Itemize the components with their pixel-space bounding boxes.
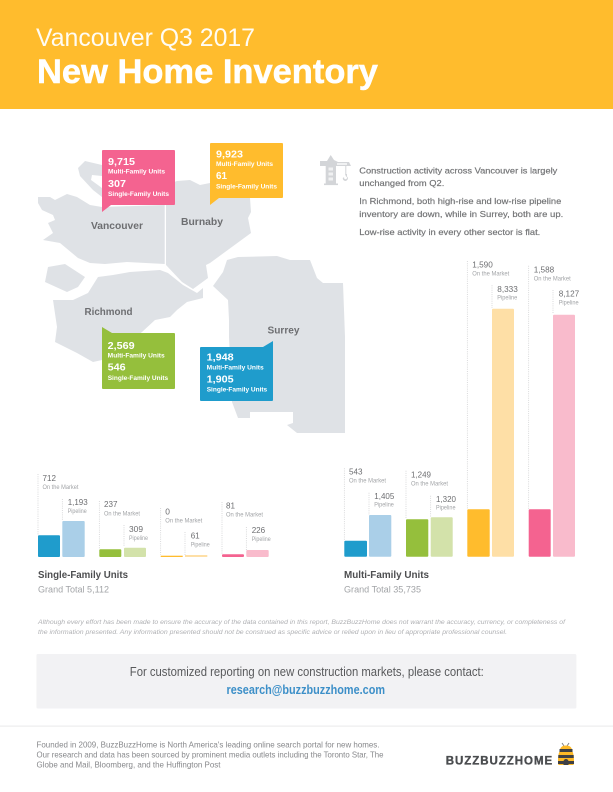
callout: Burnaby: 61: [216, 170, 227, 182]
bars: Surrey multi-family: 543: [349, 467, 363, 477]
bars: Burnaby multi-family: Pipeline: [497, 296, 518, 302]
bar chart: multi-family units: [344, 260, 580, 595]
callout: Vancouver: Single-Family Units: [108, 191, 169, 198]
bars: Surrey multi-family: [344, 467, 395, 557]
map label: Richmond: Richmond: [84, 306, 132, 318]
map region: island: [45, 264, 85, 292]
callout: Burnaby: Multi-Family Units: [216, 161, 273, 168]
bars: Surrey single-family: 1,193: [68, 497, 88, 507]
chart subtitle: single-family total: Grand Total 5,112: [38, 585, 109, 595]
intro text block: In Richmond, both high-rise and low-rise pipeline: [359, 196, 562, 206]
intro text block: Construction activity across Vancouver is largely: [359, 165, 558, 175]
about text: [36, 740, 384, 770]
map region: Vancouver: [38, 194, 165, 264]
map label: Vancouver: Vancouver: [91, 220, 143, 232]
bars: Richmond single-family: Pipeline: [129, 536, 149, 542]
callout: Surrey: Multi-Family Units: [207, 365, 264, 372]
icon: beehive: [558, 743, 574, 765]
contact email: research@buzzbuzzhome.com: [226, 683, 385, 697]
bars: Vancouver multi-family: [529, 265, 580, 557]
bars: Burnaby single-family: 61: [191, 530, 200, 540]
bars: Richmond multi-family: 1,249: [411, 470, 431, 480]
about text: Our research and data has been sourced by prominent media outlets including the Toronto Star, The: [36, 750, 384, 760]
chart title: multi-family units: Multi-Family Units: [344, 569, 429, 581]
bars: Surrey single-family: 712: [42, 473, 56, 483]
about text: Globe and Mail, Bloomberg, and the Huffington Post: [36, 760, 221, 770]
disclaimer: [37, 619, 566, 636]
callout: Surrey: [200, 341, 273, 401]
bars: Vancouver multi-family: Pipeline: [559, 301, 579, 307]
callout: Richmond: Single-Family Units: [108, 375, 169, 382]
callout: Richmond: [102, 327, 175, 389]
callout: Burnaby: Single-Family Units: [216, 183, 277, 190]
callout: Burnaby: [210, 143, 283, 205]
bars: Burnaby single-family: [161, 507, 210, 557]
intro text block: inventory are down, while in Surrey, both are up.: [359, 209, 563, 219]
callout: Vancouver: 307: [108, 178, 126, 190]
intro text block: unchanged from Q2.: [359, 178, 444, 188]
bars: Vancouver single-family: 81: [226, 501, 235, 511]
about text: Founded in 2009, BuzzBuzzHome is North America's leading online search portal for new homes.: [36, 740, 380, 750]
callout: Surrey: Single-Family Units: [207, 387, 268, 394]
logo wordmark: BUZZBUZZHOME: [446, 756, 553, 768]
bars: Richmond multi-family: On the Market: [411, 481, 448, 487]
bars: Richmond single-family: 309: [129, 524, 143, 534]
callout: Vancouver: [102, 150, 175, 212]
callout: Surrey: 1,948: [207, 352, 234, 364]
disclaimer: Although every effort has been made to ensure the accuracy of the data contained in this report, BuzzBuzzHome does not warrant the accuracy, currency, or completeness of: [37, 619, 566, 626]
bars: Surrey multi-family: 1,405: [374, 491, 395, 501]
header banner: [0, 0, 613, 109]
map region: Richmond: [53, 270, 203, 362]
chart subtitle: multi-family total: Grand Total 35,735: [344, 585, 421, 595]
icon: construction crane: [320, 155, 351, 185]
bars: Burnaby multi-family: On the Market: [472, 271, 510, 277]
callout: Richmond: Multi-Family Units: [108, 353, 165, 360]
contact panel: [36, 654, 576, 708]
bars: Burnaby multi-family: 1,590: [472, 260, 493, 270]
bars: Richmond multi-family: 1,320: [436, 494, 456, 504]
map of Metro Vancouver regions: [38, 161, 345, 433]
bars: Surrey single-family: On the Market: [42, 485, 79, 491]
bars: Surrey single-family: [38, 473, 88, 557]
bars: Burnaby single-family: 0: [165, 507, 170, 517]
map region: Burnaby: [166, 180, 251, 289]
title: subtitle line: Vancouver Q3 2017: [36, 24, 255, 52]
bars: Richmond multi-family: [406, 470, 456, 557]
bars: Surrey multi-family: Pipeline: [374, 503, 394, 509]
callout: Vancouver: Multi-Family Units: [108, 169, 165, 176]
bars: Vancouver multi-family: On the Market: [534, 276, 571, 282]
bars: Richmond single-family: [99, 499, 149, 557]
bars: Vancouver multi-family: 1,588: [534, 265, 555, 275]
chart title: single-family units: Single-Family Units: [38, 569, 128, 581]
intro text block: Low-rise activity in every other sector is flat.: [359, 227, 540, 237]
bars: Vancouver single-family: 226: [252, 525, 266, 535]
disclaimer: the information presented. Any information presented should not be construed as specific advice or relied upon in lieu of appropriate professional counsel.: [38, 629, 507, 636]
callout: Richmond: 546: [108, 362, 126, 374]
map label: Burnaby: Burnaby: [181, 216, 223, 228]
bars: Surrey multi-family: On the Market: [349, 478, 386, 484]
map region: north peninsula: [78, 161, 102, 197]
contact prompt: For customized reporting on new construction markets, please contact:: [130, 664, 484, 679]
bars: Vancouver multi-family: 8,127: [559, 289, 580, 299]
title: main heading: New Home Inventory: [37, 53, 378, 91]
callout: Vancouver: 9,715: [108, 156, 135, 168]
bars: Richmond multi-family: Pipeline: [436, 506, 456, 512]
map label: Surrey: Surrey: [268, 324, 300, 336]
bars: Vancouver single-family: [222, 501, 271, 557]
bars: Richmond single-family: 237: [104, 499, 118, 509]
intro text block: [359, 165, 563, 237]
bars: Richmond single-family: On the Market: [104, 512, 140, 518]
callout: Richmond: 2,569: [108, 340, 135, 352]
bar chart: single-family units: [38, 473, 271, 595]
bars: Burnaby multi-family: [467, 260, 518, 557]
callout: Burnaby: 9,923: [216, 148, 243, 160]
map region: Surrey: [213, 256, 345, 433]
bars: Burnaby single-family: On the Market: [165, 519, 203, 525]
bars: Surrey single-family: Pipeline: [68, 509, 87, 515]
bars: Vancouver single-family: On the Market: [226, 513, 263, 519]
bars: Burnaby single-family: Pipeline: [191, 543, 210, 549]
bars: Burnaby multi-family: 8,333: [497, 284, 518, 294]
callout: Surrey: 1,905: [207, 374, 234, 386]
bars: Vancouver single-family: Pipeline: [252, 537, 271, 543]
logo: [446, 743, 574, 768]
